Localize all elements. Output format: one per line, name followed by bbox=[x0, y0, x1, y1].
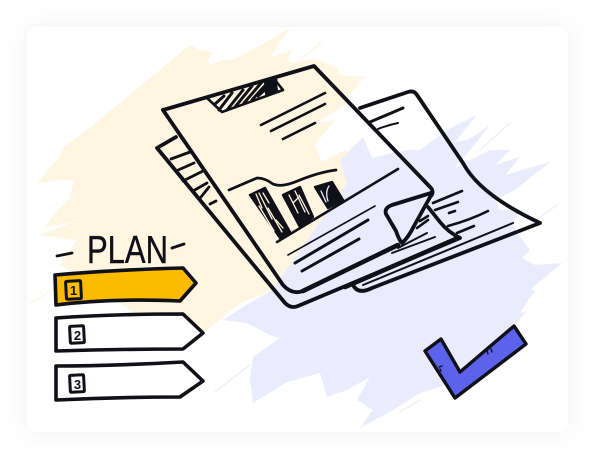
icon: check mark bbox=[425, 326, 526, 398]
hatched label bbox=[207, 78, 283, 112]
tag 3: 3 bbox=[74, 377, 81, 392]
document: front sheet bbox=[163, 66, 458, 292]
tag 1: selected bbox=[55, 268, 196, 305]
chart axis and curve bbox=[229, 170, 336, 190]
bar: right bbox=[315, 182, 343, 208]
bar: middle bbox=[283, 187, 313, 227]
tag 3 bbox=[56, 362, 203, 400]
document: back sheet bbox=[353, 91, 540, 291]
tag 1: selected: 1 bbox=[70, 283, 77, 298]
lower text lines bbox=[288, 206, 375, 255]
brush stroke: yellow bbox=[30, 28, 377, 340]
heading: PLAN: PLAN bbox=[87, 229, 168, 272]
page curl bbox=[386, 193, 431, 243]
text lines bbox=[261, 93, 325, 139]
tag 2: 2 bbox=[74, 328, 81, 343]
brush stroke: lavender bbox=[215, 115, 562, 428]
tag 2 bbox=[56, 314, 203, 351]
number box 2 bbox=[70, 326, 84, 343]
number box 1 bbox=[66, 281, 81, 299]
document: middle sheet bbox=[157, 137, 460, 307]
panel: card background bbox=[27, 27, 568, 432]
bar: left bbox=[250, 188, 290, 238]
number box 3 bbox=[70, 375, 84, 392]
